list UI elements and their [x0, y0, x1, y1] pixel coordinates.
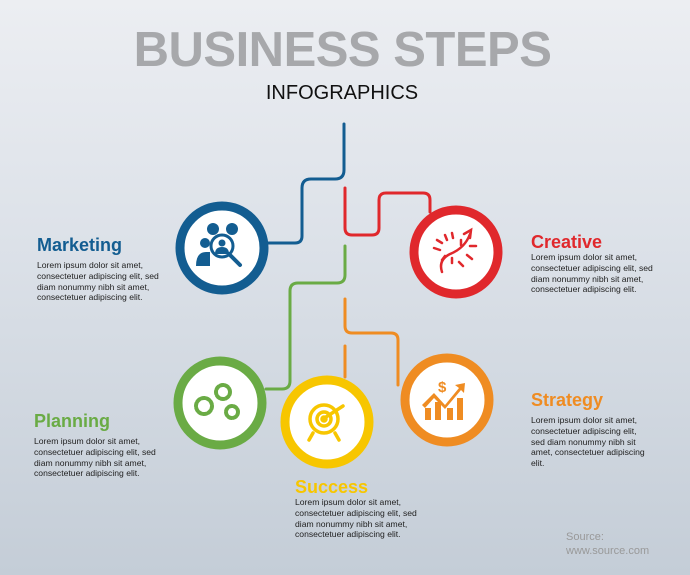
- connector: creative: [345, 188, 430, 235]
- connector: strategy: [345, 299, 398, 385]
- circle: strategy: [405, 358, 489, 442]
- text: planning: [34, 411, 156, 478]
- icon: growth chart: $: [438, 379, 447, 396]
- text: strategy: sed diam nonummy nibh sit: [531, 437, 636, 447]
- source: Source:: [566, 531, 604, 543]
- text: success: Success: [295, 477, 368, 497]
- connector: marketing: [268, 124, 344, 243]
- circle: marketing: [180, 206, 264, 290]
- circle: creative: [414, 210, 498, 294]
- circle: planning: [178, 361, 262, 445]
- text: marketing: Lorem ipsum dolor sit amet,: [37, 260, 143, 270]
- text: success: consectetuer adipiscing elit.: [295, 529, 401, 539]
- text: success: consectetuer adipiscing elit, sed: [295, 508, 417, 518]
- text: success: diam nonummy nibh sit amet,: [295, 519, 407, 529]
- text: creative: consectetuer adipiscing elit.: [531, 284, 637, 294]
- text: planning: consectetuer adipiscing elit, sed: [34, 447, 156, 457]
- text: planning: consectetuer adipiscing elit.: [34, 468, 140, 478]
- text: strategy: Strategy: [531, 390, 603, 410]
- icon: gears: [196, 385, 238, 418]
- text: success: Lorem ipsum dolor sit amet,: [295, 497, 401, 507]
- text: marketing: diam nonummy nibh sit amet,: [37, 282, 149, 292]
- text: strategy: amet, consectetuer adipiscing: [531, 447, 645, 457]
- text: marketing: consectetuer adipiscing elit.: [37, 292, 143, 302]
- subtitle: INFOGRAPHICS: [266, 82, 418, 104]
- icon: people search: [196, 223, 240, 266]
- text: planning: Lorem ipsum dolor sit amet,: [34, 436, 140, 446]
- text: creative: Lorem ipsum dolor sit amet,: [531, 252, 637, 262]
- icon: creative arrow: [434, 230, 476, 272]
- circle: success: [285, 380, 369, 464]
- source: [566, 531, 649, 557]
- text: marketing: [37, 235, 159, 302]
- text: creative: Creative: [531, 232, 602, 252]
- text: strategy: elit.: [531, 458, 544, 468]
- text: strategy: [531, 390, 645, 468]
- title: BUSINESS STEPS: [134, 23, 551, 77]
- text: planning: Planning: [34, 411, 110, 431]
- text: creative: diam nonummy nibh sit amet,: [531, 274, 643, 284]
- text: creative: consectetuer adipiscing elit, sed: [531, 263, 653, 273]
- text: marketing: Marketing: [37, 235, 122, 255]
- connector: success: [344, 346, 346, 377]
- text: strategy: Lorem ipsum dolor sit amet,: [531, 415, 637, 425]
- source: www.source.com: [566, 545, 649, 557]
- text: strategy: consectetuer adipiscing elit,: [531, 426, 637, 436]
- text: success: [295, 477, 417, 539]
- text: creative: [531, 232, 653, 294]
- text: planning: diam nonummy nibh sit amet,: [34, 458, 146, 468]
- icon: target: [309, 405, 343, 440]
- text: marketing: consectetuer adipiscing elit, sed: [37, 271, 159, 281]
- connector: planning: [266, 246, 345, 389]
